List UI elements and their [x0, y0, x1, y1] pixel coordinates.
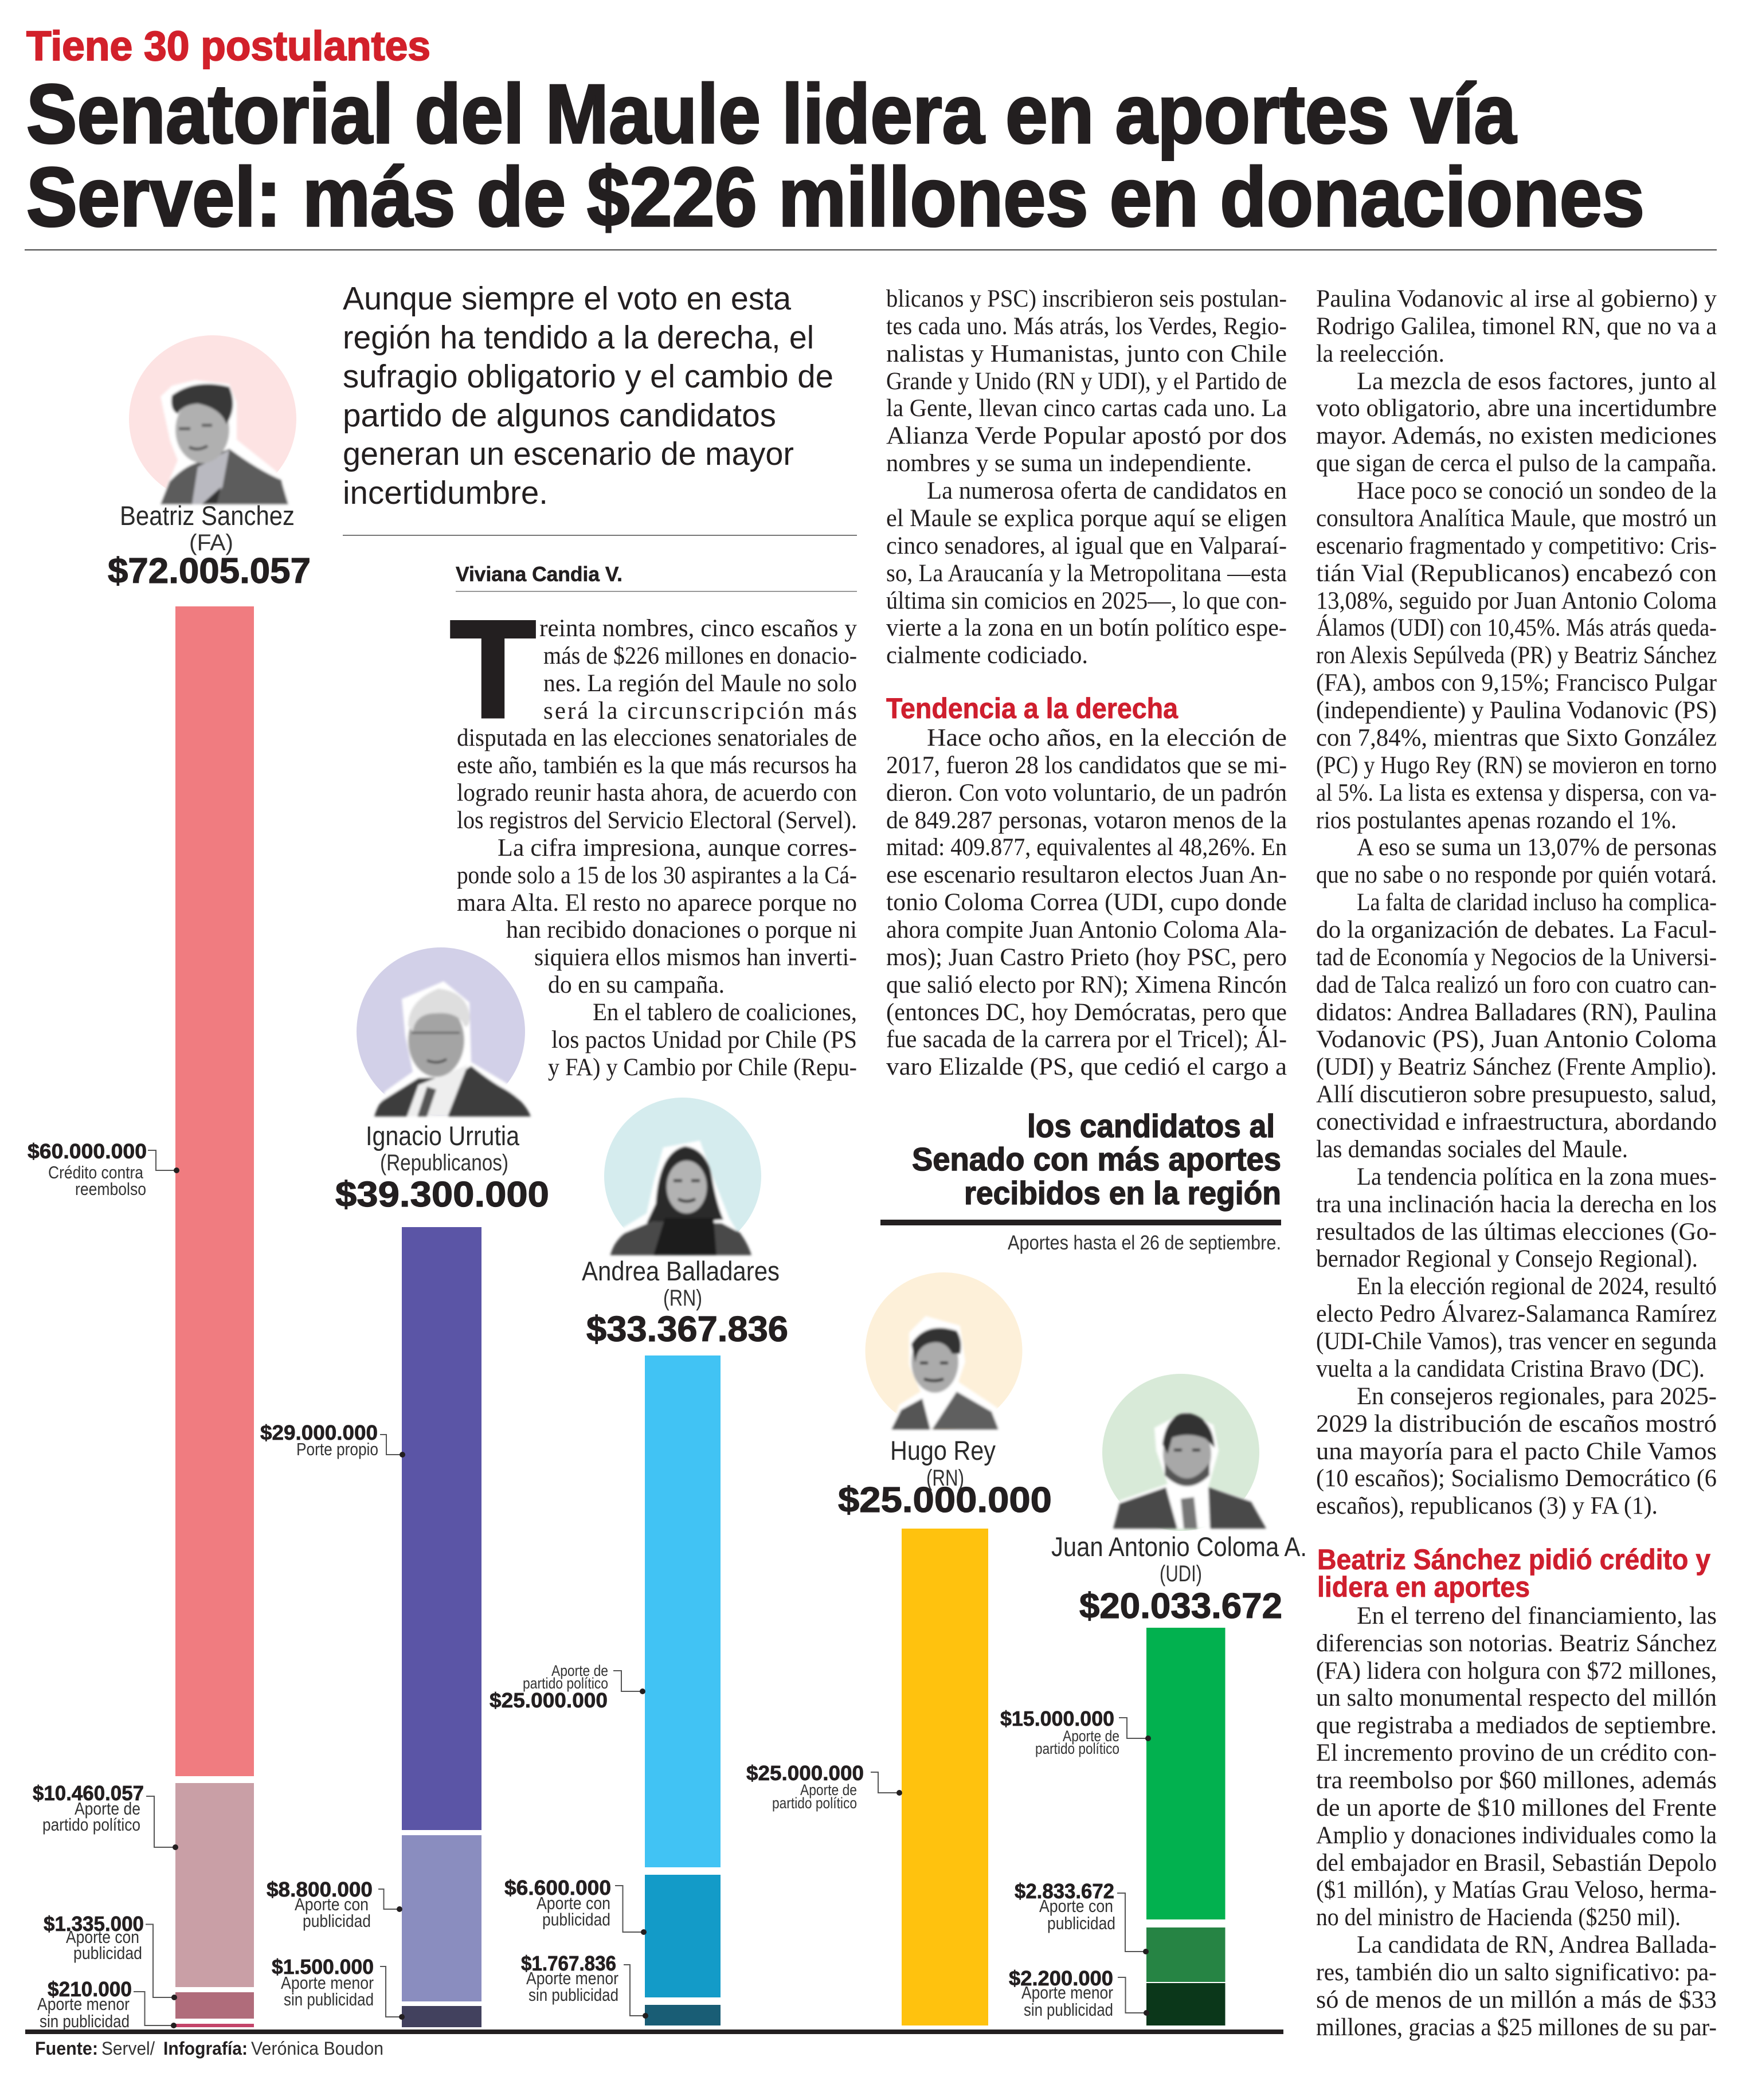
chart title: los candidatos al [1027, 1108, 1275, 1145]
source credit: Infografía: [163, 2038, 248, 2059]
article column 3: En consejeros regionales, para 2025- [1357, 1383, 1717, 1410]
label: Andrea Balladares: Andrea Balladares [582, 1256, 780, 1286]
callout: $1.500.000: sin publicidad [284, 1989, 374, 2009]
article column 3: que sigan de cerca el pulso de la campaña. [1316, 450, 1717, 477]
portrait: Andrea Balladares [604, 1098, 761, 1255]
label: Hugo Rey [838, 1435, 1052, 1520]
callout: $2.833.672: $2.833.672 [1015, 1879, 1114, 1903]
article column 3: didatos: Andrea Balladares (RN), Paulina [1316, 999, 1717, 1026]
article column 2: vierte a la zona en un botín político espe- [886, 614, 1287, 641]
article column 3: 2029 la distribución de escaños mostró [1316, 1411, 1717, 1437]
article column 3: Álamos (UDI) con 10,45%. Más atrás queda- [1316, 614, 1717, 641]
article column 2: nalistas y Humanistas, junto con Chile [886, 340, 1287, 367]
article column 3: rios postulantes apenas rozando el 1%. [1316, 807, 1677, 834]
article column 3: electo Pedro Álvarez-Salamanca Ramírez [1316, 1300, 1717, 1327]
chart baseline [25, 2030, 1283, 2034]
article column 3: de un aporte de $10 millones del Frente [1316, 1795, 1717, 1821]
callout: $6.600.000: publicidad [542, 1910, 610, 1929]
article column 2: ese escenario resultaron electos Juan An- [886, 861, 1287, 888]
article column 3: dad de Talca realizó un foro con cuatro can- [1316, 971, 1717, 998]
callout: $6.600.000: Aporte con [537, 1893, 610, 1913]
article column 3: tad de Economía y Negocios de la Universi- [1316, 944, 1717, 971]
article column 2: el Maule se explica porque aquí se eligen [886, 505, 1287, 532]
label: Ignacio Urrutia [335, 1120, 549, 1214]
callout: $25.000.000 partido: $25.000.000 [490, 1688, 608, 1712]
article column 3: escenario fragmentado y competitivo: Cris- [1316, 532, 1717, 559]
label: Andrea Balladares: (RN) [663, 1286, 702, 1311]
callout: $10.460.057: Aporte de [75, 1799, 140, 1819]
article column 3: La candidata de RN, Andrea Ballada- [1357, 1931, 1717, 1958]
article column 3: Hace poco se conoció un sondeo de la [1357, 477, 1717, 504]
subheading: Beatriz Sánchez [1317, 1543, 1710, 1603]
callout: $1.335.000 [44, 1912, 177, 2000]
article column 2: dieron. Con voto voluntario, de un padrón [886, 779, 1287, 806]
callout: $10.460.057: partido político [42, 1815, 140, 1835]
article column 1: este año, también es la que más recursos ha [457, 752, 857, 779]
callout: $29.000.000: Porte propio [296, 1439, 378, 1459]
article column 2: Hace ocho años, en la elección de [927, 724, 1287, 751]
article column 1: nes. La región del Maule no solo [543, 670, 857, 697]
article column 3: millones, gracias a $25 millones de su par- [1316, 2014, 1717, 2041]
callout: $8.800.000: Aporte con [295, 1894, 369, 1914]
article column 3: vuelta a la candidata Cristina Bravo (DC). [1316, 1355, 1705, 1382]
article column 1: mara Alta. El resto no aparece porque no [457, 890, 857, 916]
drop cap: T [450, 592, 536, 747]
callout: $60.000.000 [28, 1139, 179, 1199]
article column 3: del embajador en Brasil, Sebastián Depolo [1316, 1850, 1717, 1876]
bar: Juan Antonio Coloma [1146, 1628, 1226, 2025]
article column 3: En la elección regional de 2024, resultó [1357, 1273, 1717, 1300]
callout: $15.000.000: partido político [1035, 1740, 1119, 1757]
article column 3: tián Vial (Republicanos) encabezó con [1316, 560, 1717, 587]
label: Hugo Rey: $25.000.000 [838, 1480, 1052, 1520]
article column 3: un salto monumental respecto del millón [1316, 1684, 1717, 1711]
callout: $2.200.000: $2.200.000 [1009, 1966, 1113, 1990]
article column 3: con 7,84%, mientras que Sixto González [1316, 724, 1717, 751]
callout: $8.800.000: publicidad [303, 1911, 371, 1931]
label: Beatriz Sanchez: Beatriz Sanchez [120, 500, 295, 531]
article column 3: 13,08%, seguido por Juan Antonio Coloma [1316, 587, 1717, 614]
article column 2: cinco senadores, al igual que en Valparaí- [886, 532, 1287, 559]
article column 2: varo Elizalde (PS, que cedió el cargo a [886, 1053, 1287, 1080]
article column 3: bernador Regional y Consejo Regional). [1316, 1245, 1698, 1272]
article column 3: ($1 millón), y Matías Grau Veloso, herma- [1316, 1876, 1717, 1903]
article column 3: (UDI) y Beatriz Sánchez (Frente Amplio). [1316, 1053, 1717, 1080]
deck paragraph: Aunque siempre el voto en esta [343, 280, 791, 317]
article column 1: han recibido donaciones o porque ni [506, 916, 857, 943]
article column 1: ponde solo a 15 de los 30 aspirantes a la Cá- [457, 862, 857, 889]
article column 2: cialmente codiciado. [886, 642, 1088, 669]
source credit: Fuente: [35, 2038, 98, 2059]
callout: $29.000.000: $29.000.000 [260, 1421, 378, 1444]
article column 3: Rodrigo Galilea, timonel RN, que no va a [1316, 313, 1717, 340]
article column 3: al 5%. La lista es extensa y dispersa, con va- [1316, 779, 1717, 806]
article column 3: res, también dio un salto significativo: pa- [1316, 1959, 1717, 1986]
callout: $25.000.000 partido [490, 1662, 645, 1712]
label: Beatriz Sanchez: (FA) [189, 530, 233, 555]
article column 2: Alianza Verde Popular apostó por dos [886, 422, 1287, 449]
title: Servel: más de $226 millones en donaciones [26, 150, 1645, 244]
callout: $60.000.000: reembolso [75, 1179, 146, 1199]
label: Juan Antonio Coloma: Juan Antonio Coloma A. [1051, 1531, 1307, 1562]
callout: $10.460.057 [33, 1781, 178, 1850]
label: Ignacio Urrutia: $39.300.000 [335, 1175, 549, 1214]
article column 3: (10 escaños); Socialismo Democrático (6 [1316, 1465, 1717, 1492]
portrait: Beatriz Sanchez [129, 335, 296, 505]
callout: $8.800.000 [267, 1878, 402, 1931]
article column 2: ahora compite Juan Antonio Coloma Ala- [886, 916, 1287, 943]
subheading: Beatriz Sánchez: lidera en aportes [1317, 1571, 1530, 1603]
label: Andrea Balladares: $33.367.836 [586, 1310, 788, 1349]
article column 1: siquiera ellos mismos han inverti- [534, 944, 857, 971]
article column 3: consultora Analítica Maule, que mostró un [1316, 505, 1717, 532]
article column 2: tes cada uno. Más atrás, los Verdes, Regio- [886, 313, 1287, 340]
chart title [880, 1108, 1281, 1254]
article column 3: una mayoría para el pacto Chile Vamos [1316, 1438, 1717, 1465]
title [26, 67, 1645, 244]
article column 1: do en su campaña. [548, 971, 725, 998]
article column 3: Allí discutieron sobre presupuesto, salud, [1316, 1081, 1717, 1108]
callout: $60.000.000: $60.000.000 [28, 1139, 147, 1163]
callout: $1.335.000: publicidad [73, 1943, 142, 1963]
callout: $10.460.057: $10.460.057 [33, 1781, 144, 1805]
deck paragraph: incertidumbre. [343, 475, 548, 511]
article column 3: (UDI-Chile Vamos), tras vencer en segunda [1316, 1328, 1717, 1355]
callout: $6.600.000: $6.600.000 [504, 1876, 611, 1899]
article column 3 [1316, 285, 1717, 2041]
portrait: Hugo Rey [866, 1272, 1023, 1429]
article column 2: que salió electo por RN); Ximena Rincón [886, 971, 1287, 998]
article column 3: tra una inclinación hacia la derecha en los [1316, 1191, 1717, 1218]
article column 3: mayor. Además, no existen mediciones [1316, 422, 1717, 449]
article column 1: En el tablero de coaliciones, [593, 999, 857, 1026]
article column 3: (PC) y Hugo Rey (RN) se movieron en torno [1316, 752, 1717, 779]
article column 3: (FA) lidera con holgura con $72 millones, [1316, 1658, 1717, 1684]
article column 2: (entonces DC, hoy Demócratas, pero que [886, 999, 1287, 1026]
callout: $2.833.672: publicidad [1047, 1913, 1115, 1933]
label: Ignacio Urrutia: Ignacio Urrutia [366, 1120, 520, 1151]
article column 3: La mezcla de esos factores, junto al [1357, 368, 1717, 395]
callout: $1.767.836: Aporte menor [526, 1968, 618, 1988]
callout: $25.000.000 Hugo Rey [746, 1761, 902, 1812]
deck paragraph: generan un escenario de mayor [343, 436, 794, 472]
article column 1: La cifra impresiona, aunque corres- [498, 834, 857, 861]
article column 3: Paulina Vodanovic al irse al gobierno) y [1316, 285, 1717, 312]
callout: $8.800.000: $8.800.000 [267, 1878, 373, 1901]
callout: $2.200.000 [1009, 1966, 1149, 2020]
title: Senatorial del Maule lidera en aportes vía [26, 67, 1517, 160]
bar: Andrea Balladares [645, 1355, 721, 2025]
article column 3: voto obligatorio, abre una incertidumbre [1316, 395, 1717, 422]
article column 1: más de $226 millones en donacio- [543, 642, 857, 669]
callout: $60.000.000: Crédito contra [48, 1162, 144, 1182]
callout: $2.833.672: Aporte con [1039, 1896, 1113, 1916]
callout: $25.000.000 Hugo Rey: partido político [772, 1795, 857, 1812]
label: Hugo Rey: (RN) [926, 1466, 964, 1491]
article column 3: la reelección. [1316, 340, 1444, 367]
portrait: Juan Antonio Coloma [1102, 1374, 1266, 1531]
callout: $210.000: Aporte menor [37, 1994, 130, 2014]
article column 2: tonio Coloma Correa (UDI, cupo donde [886, 889, 1287, 916]
byline: Viviana Candia V. [456, 562, 622, 586]
article column 2: mos); Juan Castro Prieto (hoy PSC, pero [886, 944, 1287, 971]
label: Juan Antonio Coloma [1051, 1531, 1307, 1626]
article column 3: resultados de las últimas elecciones (Go- [1316, 1219, 1717, 1245]
subheading: tendencia: Tendencia a la derecha [886, 692, 1179, 724]
article column 2: La numerosa oferta de candidatos en [927, 477, 1287, 504]
callout: $2.200.000: Aporte menor [1021, 1983, 1113, 2003]
article column 1 [457, 615, 858, 1081]
label: Juan Antonio Coloma: $20.033.672 [1079, 1586, 1282, 1626]
chart title: recibidos en la región [964, 1175, 1281, 1212]
article column 3: do la organización de debates. La Facul- [1316, 916, 1717, 943]
callout: $1.500.000: Aporte menor [281, 1973, 374, 1993]
callout: $1.500.000 [272, 1955, 405, 2020]
article column 2: mitad: 409.877, equivalentes al 48,26%. En [886, 834, 1287, 861]
label: Beatriz Sanchez [108, 500, 311, 591]
article column 3: A eso se suma un 13,07% de personas [1357, 834, 1717, 861]
article column 1: y FA) y Cambio por Chile (Repu- [548, 1054, 857, 1081]
article column 3: tra reembolso por $60 millones, además [1316, 1767, 1717, 1794]
kicker: Tiene 30 postulantes [26, 23, 430, 69]
deck paragraph [343, 280, 833, 511]
source credit [35, 2038, 383, 2059]
callout: $25.000.000 Hugo Rey: Aporte de [800, 1781, 857, 1799]
callout: $2.833.672 [1015, 1879, 1149, 1954]
article column 2: nombres y se suma un independiente. [886, 450, 1252, 477]
deck paragraph: región ha tendido a la derecha, el [343, 319, 814, 356]
article column 1: disputada en las elecciones senatoriales de [457, 724, 857, 751]
article column 3: (independiente) y Paulina Vodanovic (PS) [1316, 697, 1717, 724]
label: Juan Antonio Coloma: (UDI) [1160, 1561, 1202, 1586]
article column 2: Grande y Unido (RN y UDI), y el Partido de [886, 368, 1287, 395]
article column 1: los registros del Servicio Electoral (Servel). [457, 807, 857, 834]
article column 3: ron Alexis Sepúlveda (PR) y Beatriz Sánchez [1316, 642, 1717, 669]
article column 2: la Gente, llevan cinco cartas cada uno. La [886, 395, 1287, 422]
subheading: Beatriz Sánchez: Beatriz Sánchez pidió crédito y [1317, 1543, 1710, 1576]
article column 3: no del ministro de Hacienda ($250 mil). [1316, 1904, 1681, 1931]
callout: $29.000.000 [260, 1421, 405, 1459]
article column 2: fue sacada de la carrera por el Tricel); Ál- [886, 1026, 1287, 1053]
callout: $1.500.000: $1.500.000 [272, 1955, 374, 1978]
article column 1: logrado reunir hasta ahora, de acuerdo con [457, 779, 857, 806]
article column 1: reinta nombres, cinco escaños y [539, 615, 858, 642]
article column 3: conectividad e infraestructura, abordando [1316, 1108, 1717, 1135]
deck paragraph: partido de algunos candidatos [343, 397, 776, 434]
chart title: Senado con más aportes [912, 1141, 1281, 1178]
callout: $210.000: $210.000 [48, 1977, 132, 2001]
article column 3: las demandas sociales del Maule. [1316, 1136, 1628, 1163]
article column 3: que registraba a mediados de septiembre. [1316, 1712, 1717, 1739]
callout: $2.200.000: sin publicidad [1024, 2000, 1113, 2020]
article column 3: La tendencia política en la zona mues- [1357, 1163, 1717, 1190]
article column 1: los pactos Unidad por Chile (PS [551, 1027, 857, 1053]
article column 2: blicanos y PSC) inscribieron seis postulan- [886, 285, 1287, 312]
bar: Ignacio Urrutia [402, 1227, 481, 2027]
article column 3: (FA), ambos con 9,15%; Francisco Pulgar [1316, 669, 1717, 696]
portrait: Ignacio Urrutia [357, 947, 531, 1116]
article column 3: En el terreno del financiamiento, las [1357, 1603, 1717, 1629]
callout: $15.000.000: Aporte de [1063, 1727, 1119, 1745]
source credit: Verónica Boudon [251, 2038, 383, 2059]
article column 3: só de menos de un millón a más de $33 [1316, 1987, 1717, 2013]
deck paragraph: sufragio obligatorio y el cambio de [343, 358, 833, 395]
article column 3: escaños), republicanos (3) y FA (1). [1316, 1492, 1658, 1519]
callout: $25.000.000 partido: Aporte de [551, 1662, 608, 1679]
label: Hugo Rey: Hugo Rey [890, 1435, 996, 1466]
label: Andrea Balladares [582, 1256, 788, 1349]
callout: $25.000.000 Hugo Rey: $25.000.000 [746, 1761, 864, 1785]
label: Beatriz Sanchez: $72.005.057 [108, 551, 311, 591]
article column 2 [886, 285, 1287, 1080]
callout: $15.000.000 [1000, 1707, 1151, 1757]
article column 2: 2017, fueron 28 los candidatos que se mi- [886, 752, 1287, 779]
callout: $1.767.836: $1.767.836 [521, 1952, 616, 1975]
callout: $15.000.000: $15.000.000 [1000, 1707, 1114, 1730]
chart title: Aportes hasta el 26 de septiembre. [1008, 1232, 1281, 1254]
callout: $6.600.000 [504, 1876, 647, 1935]
label: Ignacio Urrutia: (Republicanos) [380, 1150, 508, 1176]
callout: $1.335.000: Aporte con [66, 1927, 139, 1947]
callout: $210.000 [37, 1977, 177, 2031]
callout: $25.000.000 partido: partido político [523, 1675, 608, 1692]
callout: $210.000: sin publicidad [40, 2011, 130, 2031]
article column 3: El incremento provino de un crédito con- [1316, 1739, 1717, 1766]
bar: Hugo Rey [902, 1529, 988, 2025]
article column 2: de 849.287 personas, votaron menos de la [886, 807, 1287, 834]
article column 3: La falta de claridad incluso ha complica- [1357, 889, 1717, 916]
article column 3: Vodanovic (PS), Juan Antonio Coloma [1316, 1026, 1717, 1053]
article column 3: diferencias son notorias. Beatriz Sánchez [1316, 1630, 1717, 1657]
article column 2: so, La Araucanía y la Metropolitana —esta [886, 560, 1287, 587]
callout: $1.335.000: $1.335.000 [44, 1912, 144, 1936]
article column 2: última sin comicios en 2025—, lo que con- [886, 587, 1287, 614]
article column 3: que no sabe o no responde por quién votará. [1316, 861, 1717, 888]
bar: Beatriz Sanchez [175, 606, 254, 2027]
article column 3: Amplio y donaciones individuales como la [1316, 1822, 1717, 1849]
source credit: Servel/ [101, 2038, 155, 2059]
callout: $1.767.836: sin publicidad [528, 1985, 618, 2005]
article column 1: será la circunscripción más [543, 698, 857, 724]
callout: $1.767.836 [521, 1952, 648, 2019]
